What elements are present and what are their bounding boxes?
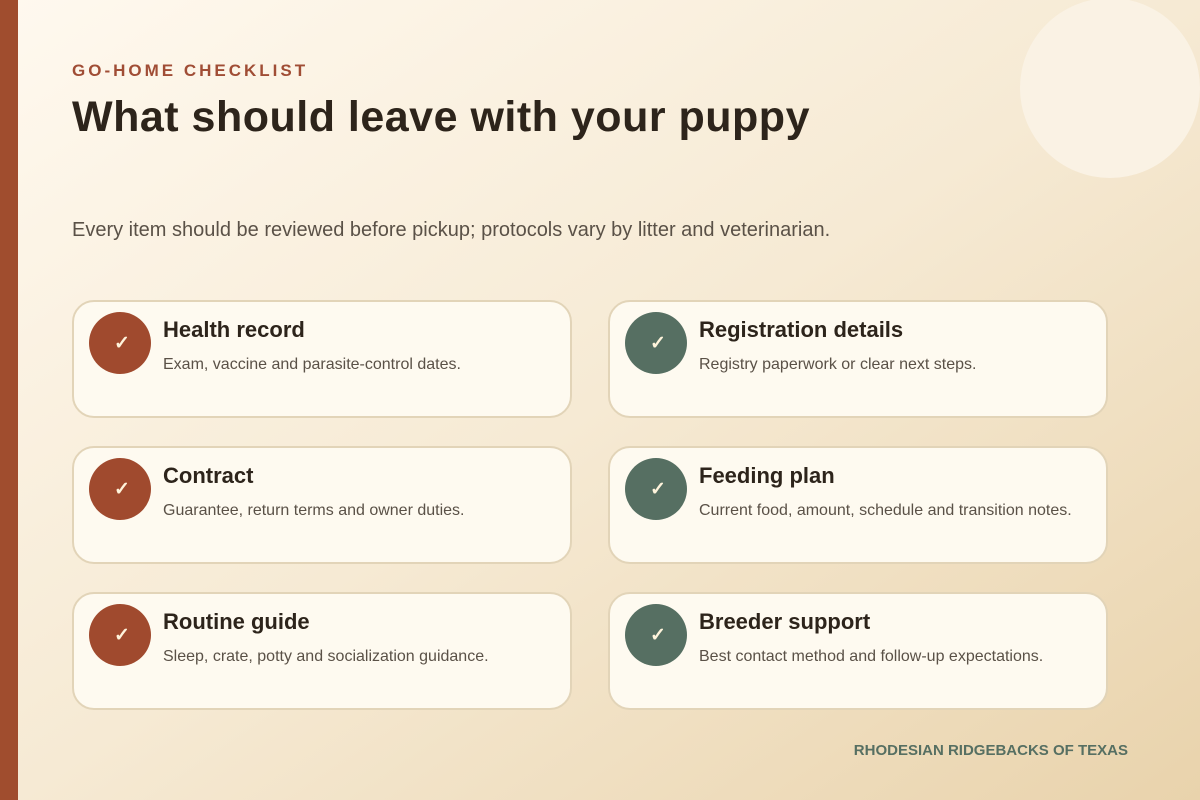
panel: routine guide <box>72 592 572 710</box>
icon: check: ✓ <box>114 333 130 354</box>
icon: check: ✓ <box>114 479 130 500</box>
subtitle: Every item should be reviewed before pickup; protocols vary by litter and veterinarian. <box>72 219 830 241</box>
footer brand: RHODESIAN RIDGEBACKS OF TEXAS <box>854 742 1128 759</box>
decorative circle <box>1020 0 1200 178</box>
icon: check <box>89 312 151 374</box>
card description: Guarantee, return terms and owner duties. <box>163 502 464 519</box>
icon: check: ✓ <box>650 333 666 354</box>
panel: feeding plan <box>608 446 1108 564</box>
panel: health record <box>72 300 572 418</box>
icon: check <box>625 312 687 374</box>
card title: Registration details <box>699 317 903 342</box>
icon: check: ✓ <box>114 625 130 646</box>
icon: check <box>625 458 687 520</box>
card description: Current food, amount, schedule and transition notes. <box>699 502 1072 519</box>
title: What should leave with your puppy <box>72 93 810 141</box>
icon: check <box>89 458 151 520</box>
icon: check: ✓ <box>650 479 666 500</box>
card title: Feeding plan <box>699 463 835 488</box>
icon: check <box>625 604 687 666</box>
card description: Best contact method and follow-up expectations. <box>699 648 1043 665</box>
panel: registration details <box>608 300 1108 418</box>
card title: Breeder support <box>699 609 870 634</box>
card description: Exam, vaccine and parasite-control dates. <box>163 356 461 373</box>
left accent bar <box>0 0 18 800</box>
icon: check <box>89 604 151 666</box>
panel: contract <box>72 446 572 564</box>
card description: Sleep, crate, potty and socialization guidance. <box>163 648 489 665</box>
card title: Routine guide <box>163 609 310 634</box>
card title: Health record <box>163 317 305 342</box>
card description: Registry paperwork or clear next steps. <box>699 356 976 373</box>
eyebrow label: GO-HOME CHECKLIST <box>72 61 308 80</box>
card title: Contract <box>163 463 253 488</box>
icon: check: ✓ <box>650 625 666 646</box>
panel: breeder support <box>608 592 1108 710</box>
